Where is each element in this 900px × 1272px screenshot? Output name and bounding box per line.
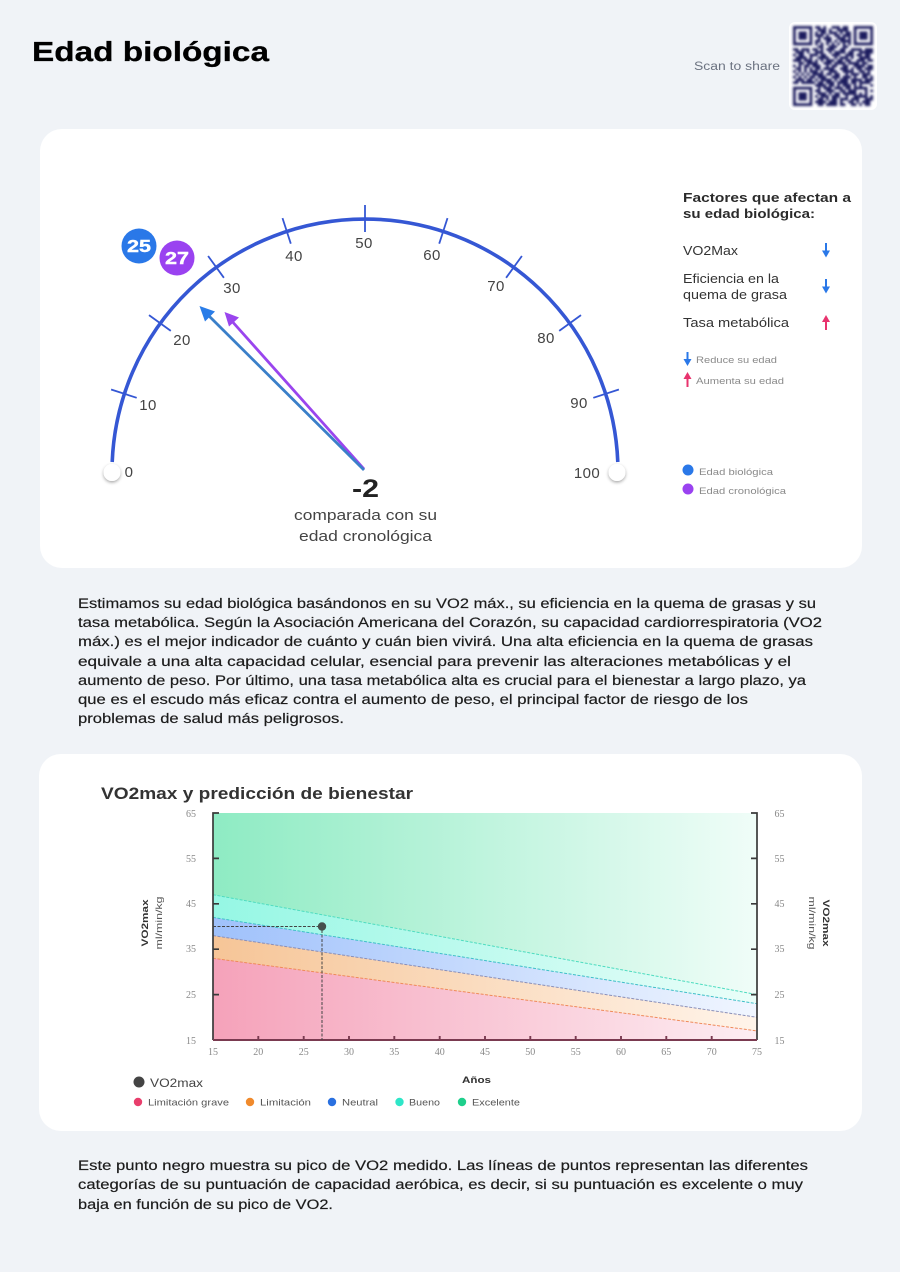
measured VO2 point with guide lines xyxy=(213,922,326,1040)
factors heading: su edad biológica: xyxy=(683,206,815,221)
panel: VO2max chart xyxy=(39,754,862,1131)
text block: biological age explanation: Estimamos su edad biológica basándonos en su VO2 máx., su eficiencia en la quema de grasas y su xyxy=(78,596,816,611)
gauge scale labels: 60 xyxy=(423,247,441,264)
text block: biological age explanation: aumento de peso. Por último, una tasa metabólica alta es crucial para el bienestar a largo plazo, ya xyxy=(78,673,807,688)
gauge scale labels: 40 xyxy=(285,248,303,265)
gauge value: -2 xyxy=(352,475,379,503)
gauge scale labels: 0 xyxy=(125,464,133,481)
factors heading xyxy=(683,190,852,221)
gauge arc with ticks xyxy=(111,205,619,462)
gauge scale labels: 100 xyxy=(574,465,600,482)
gauge scale labels: 20 xyxy=(173,332,191,349)
x axis labels: 55 xyxy=(571,1047,581,1058)
legend: reduces age xyxy=(684,352,777,366)
legend: VO2max point xyxy=(134,1076,203,1090)
right axis labels: 35 xyxy=(774,944,784,955)
legend: excellent: Excelente xyxy=(472,1098,520,1108)
text block: biological age explanation: equivale a una alta capacidad celular, esencial para prevenir las alteraciones metabólicas y el xyxy=(78,654,791,669)
text block: chart explanation: Este punto negro muestra su pico de VO2 medido. Las líneas de puntos representan las diferentes xyxy=(78,1158,808,1173)
left axis labels: 15 xyxy=(186,1036,196,1047)
factor: fat burning efficiency: Eficiencia en la xyxy=(683,272,779,286)
factors heading: Factores que afectan a xyxy=(683,190,852,205)
right axis labels: 65 xyxy=(774,809,784,820)
left axis labels: 25 xyxy=(186,990,196,1001)
badge: biological age 25 xyxy=(122,228,156,264)
text block: chart explanation: baja en función de su pico de VO2. xyxy=(78,1197,333,1212)
legend: chronological age xyxy=(682,484,787,497)
x axis labels: 75 xyxy=(752,1047,762,1058)
right y axis title: ml/min/kg xyxy=(806,896,817,950)
gauge scale labels: 90 xyxy=(570,395,588,412)
gauge caption xyxy=(294,508,437,545)
legend: limitation: Limitación xyxy=(260,1098,311,1108)
x axis labels: 50 xyxy=(525,1047,535,1058)
left y axis title: ml/min/kg xyxy=(154,896,165,950)
gauge end knobs xyxy=(104,464,626,481)
right axis labels: 15 xyxy=(774,1036,784,1047)
x axis labels: 40 xyxy=(435,1047,445,1058)
legend: good: Bueno xyxy=(409,1098,440,1108)
x axis labels: 35 xyxy=(389,1047,399,1058)
x axis labels: 70 xyxy=(707,1047,717,1058)
gauge scale labels: 70 xyxy=(487,278,505,295)
gauge scale labels xyxy=(125,235,600,482)
x axis labels: 30 xyxy=(344,1047,354,1058)
text block: biological age explanation xyxy=(78,596,822,726)
text block: chart explanation: categorías de su puntuación de capacidad aeróbica, es decir, si su puntuación es excelente o muy xyxy=(78,1177,803,1192)
left y axis title xyxy=(140,896,165,950)
badge: chronological age 27 xyxy=(160,240,194,276)
x axis labels xyxy=(208,1047,762,1058)
legend: excellent xyxy=(458,1098,520,1108)
x axis labels: 15 xyxy=(208,1047,218,1058)
x axis labels: 25 xyxy=(299,1047,309,1058)
right y axis title xyxy=(806,896,831,950)
text block: chart explanation xyxy=(78,1158,808,1212)
chart title: VO2max y predicción de bienestar xyxy=(101,785,414,803)
left axis labels xyxy=(186,809,196,1047)
factor: VO2Max xyxy=(683,243,830,258)
legend: neutral xyxy=(328,1098,378,1108)
factor: VO2Max: VO2Max xyxy=(683,244,739,258)
text block: biological age explanation: tasa metabólica. Según la Asociación Americana del Corazón, su capacidad cardiorrespiratoria (VO2 xyxy=(78,615,822,630)
left y axis title: VO2max xyxy=(140,899,151,946)
factor: fat burning efficiency: quema de grasa xyxy=(683,288,787,302)
text block: biological age explanation: problemas de salud más peligrosos. xyxy=(78,711,344,726)
right axis labels xyxy=(774,809,784,1047)
legend: chronological age: Edad cronológica xyxy=(699,486,787,497)
left axis labels: 35 xyxy=(186,944,196,955)
left axis labels: 65 xyxy=(186,809,196,820)
legend: biological age xyxy=(682,464,774,478)
panel: biological age gauge xyxy=(40,129,862,568)
legend: VO2max point: VO2max xyxy=(150,1078,203,1090)
right y axis title: VO2max xyxy=(820,900,831,947)
legend: good xyxy=(395,1098,440,1108)
x axis labels: 60 xyxy=(616,1047,626,1058)
legend: neutral: Neutral xyxy=(342,1098,378,1108)
arrow: biological age needle xyxy=(200,306,364,470)
factor: metabolic rate: Tasa metabólica xyxy=(683,316,789,330)
gauge scale labels: 80 xyxy=(537,330,555,347)
legend: limitation xyxy=(246,1098,311,1108)
badge: biological age 25: 25 xyxy=(127,236,151,256)
plot area bands xyxy=(213,813,757,1040)
legend: biological age: Edad biológica xyxy=(699,467,774,478)
title: Edad biológica xyxy=(32,36,269,67)
gauge caption: comparada con su xyxy=(294,508,437,524)
right axis labels: 55 xyxy=(774,854,784,865)
chart axes xyxy=(213,813,757,1040)
gauge scale labels: 10 xyxy=(139,397,157,414)
text block: biological age explanation: máx.) es el mejor indicador de cuánto y cuán bien vivirá. Una alta eficiencia en la quema de grasas xyxy=(78,634,813,649)
gauge caption: edad cronológica xyxy=(299,529,433,545)
right axis labels: 25 xyxy=(774,990,784,1001)
legend: increases age: Aumenta su edad xyxy=(696,376,784,387)
right axis labels: 45 xyxy=(774,899,784,910)
factor: fat burning efficiency xyxy=(683,272,830,302)
left axis labels: 45 xyxy=(186,899,196,910)
text block: biological age explanation: que es el escudo más eficaz contra el aumento de peso, el principal factor de riesgo de los xyxy=(78,692,748,707)
x axis title: Años xyxy=(462,1075,491,1086)
badge: chronological age 27: 27 xyxy=(165,248,189,268)
x axis labels: 20 xyxy=(253,1047,263,1058)
legend: severe limitation: Limitación grave xyxy=(148,1098,229,1108)
x axis labels: 45 xyxy=(480,1047,490,1058)
gauge scale labels: 30 xyxy=(223,280,241,297)
legend: increases age xyxy=(684,372,784,387)
x axis labels: 65 xyxy=(661,1047,671,1058)
legend: reduces age: Reduce su edad xyxy=(696,355,777,366)
gauge scale labels: 50 xyxy=(355,235,373,252)
left axis labels: 55 xyxy=(186,854,196,865)
scan to share label: Scan to share xyxy=(694,61,780,73)
arrow: chronological age needle xyxy=(224,312,364,469)
QR code xyxy=(789,22,877,110)
factor: metabolic rate xyxy=(683,315,830,330)
category boundary lines xyxy=(213,895,757,1031)
